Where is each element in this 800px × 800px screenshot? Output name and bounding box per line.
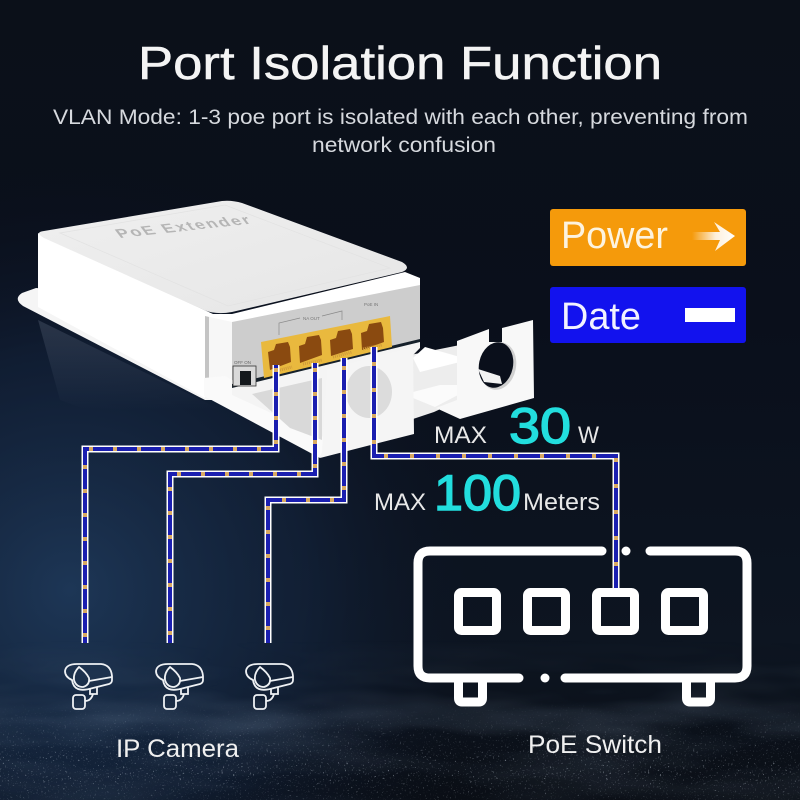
clips [320,320,534,458]
callout: max 100 meters [374,465,600,521]
switch label: OFF ON [234,360,251,365]
port labels: PoE IN [364,302,378,307]
floor glow [38,320,320,470]
icon: power arrow [692,222,735,251]
clip near [320,347,414,458]
legend: data: Date [561,296,641,338]
cable 3 [268,358,344,643]
mounting flange [18,288,225,400]
icon: camera 2 [156,664,203,709]
subtitle text [53,106,748,157]
port 4 [361,322,384,350]
clip far [436,320,534,419]
subtitle text: network confusion [312,134,496,157]
background [0,266,800,800]
callout: max 30 W: W [578,422,599,449]
port 3 [330,329,353,356]
cable 1 [85,365,276,643]
legend: power: Power [561,215,668,257]
callout: max 100 meters: Meters [523,489,600,516]
icon: camera 1 [65,664,112,709]
port labels [303,302,378,321]
legend: data [550,287,746,343]
yellow RJ45 block [261,316,392,378]
inner arms [410,345,460,420]
lid [39,201,407,313]
subtitle text: VLAN Mode: 1-3 poe port is isolated with each other, preventing from [53,106,748,129]
icon: data bar [685,308,735,322]
port labels: NA OUT [303,316,320,321]
icon: PoE switch [418,546,747,702]
left inner wall [205,316,232,392]
port contacts [276,345,382,371]
switch label [233,360,256,386]
lid print: PoE Extender [112,213,255,241]
title: Port Isolation Function [138,37,662,89]
dark strip under panel [232,339,420,388]
port 1 [268,342,291,370]
device: PoE extender [18,201,420,470]
callout: max 30 W: MAX [434,422,487,449]
callout: max 100 meters: MAX [374,489,426,516]
front face rim [204,272,420,425]
label: IP Camera: IP Camera [116,735,239,763]
cable 2 [170,363,315,643]
grey front panel [232,285,420,386]
legend: power [550,209,746,266]
case lower lip [204,376,330,458]
icon: camera 3 [246,664,293,709]
callout: max 30 W [434,398,599,454]
cable 4 [374,347,616,590]
left side of the case [38,233,213,398]
port 2 [299,335,322,363]
label: PoE Switch: PoE Switch [528,731,662,759]
callout: max 100 meters: 100 [434,465,521,521]
callout: max 30 W: 30 [509,398,571,454]
